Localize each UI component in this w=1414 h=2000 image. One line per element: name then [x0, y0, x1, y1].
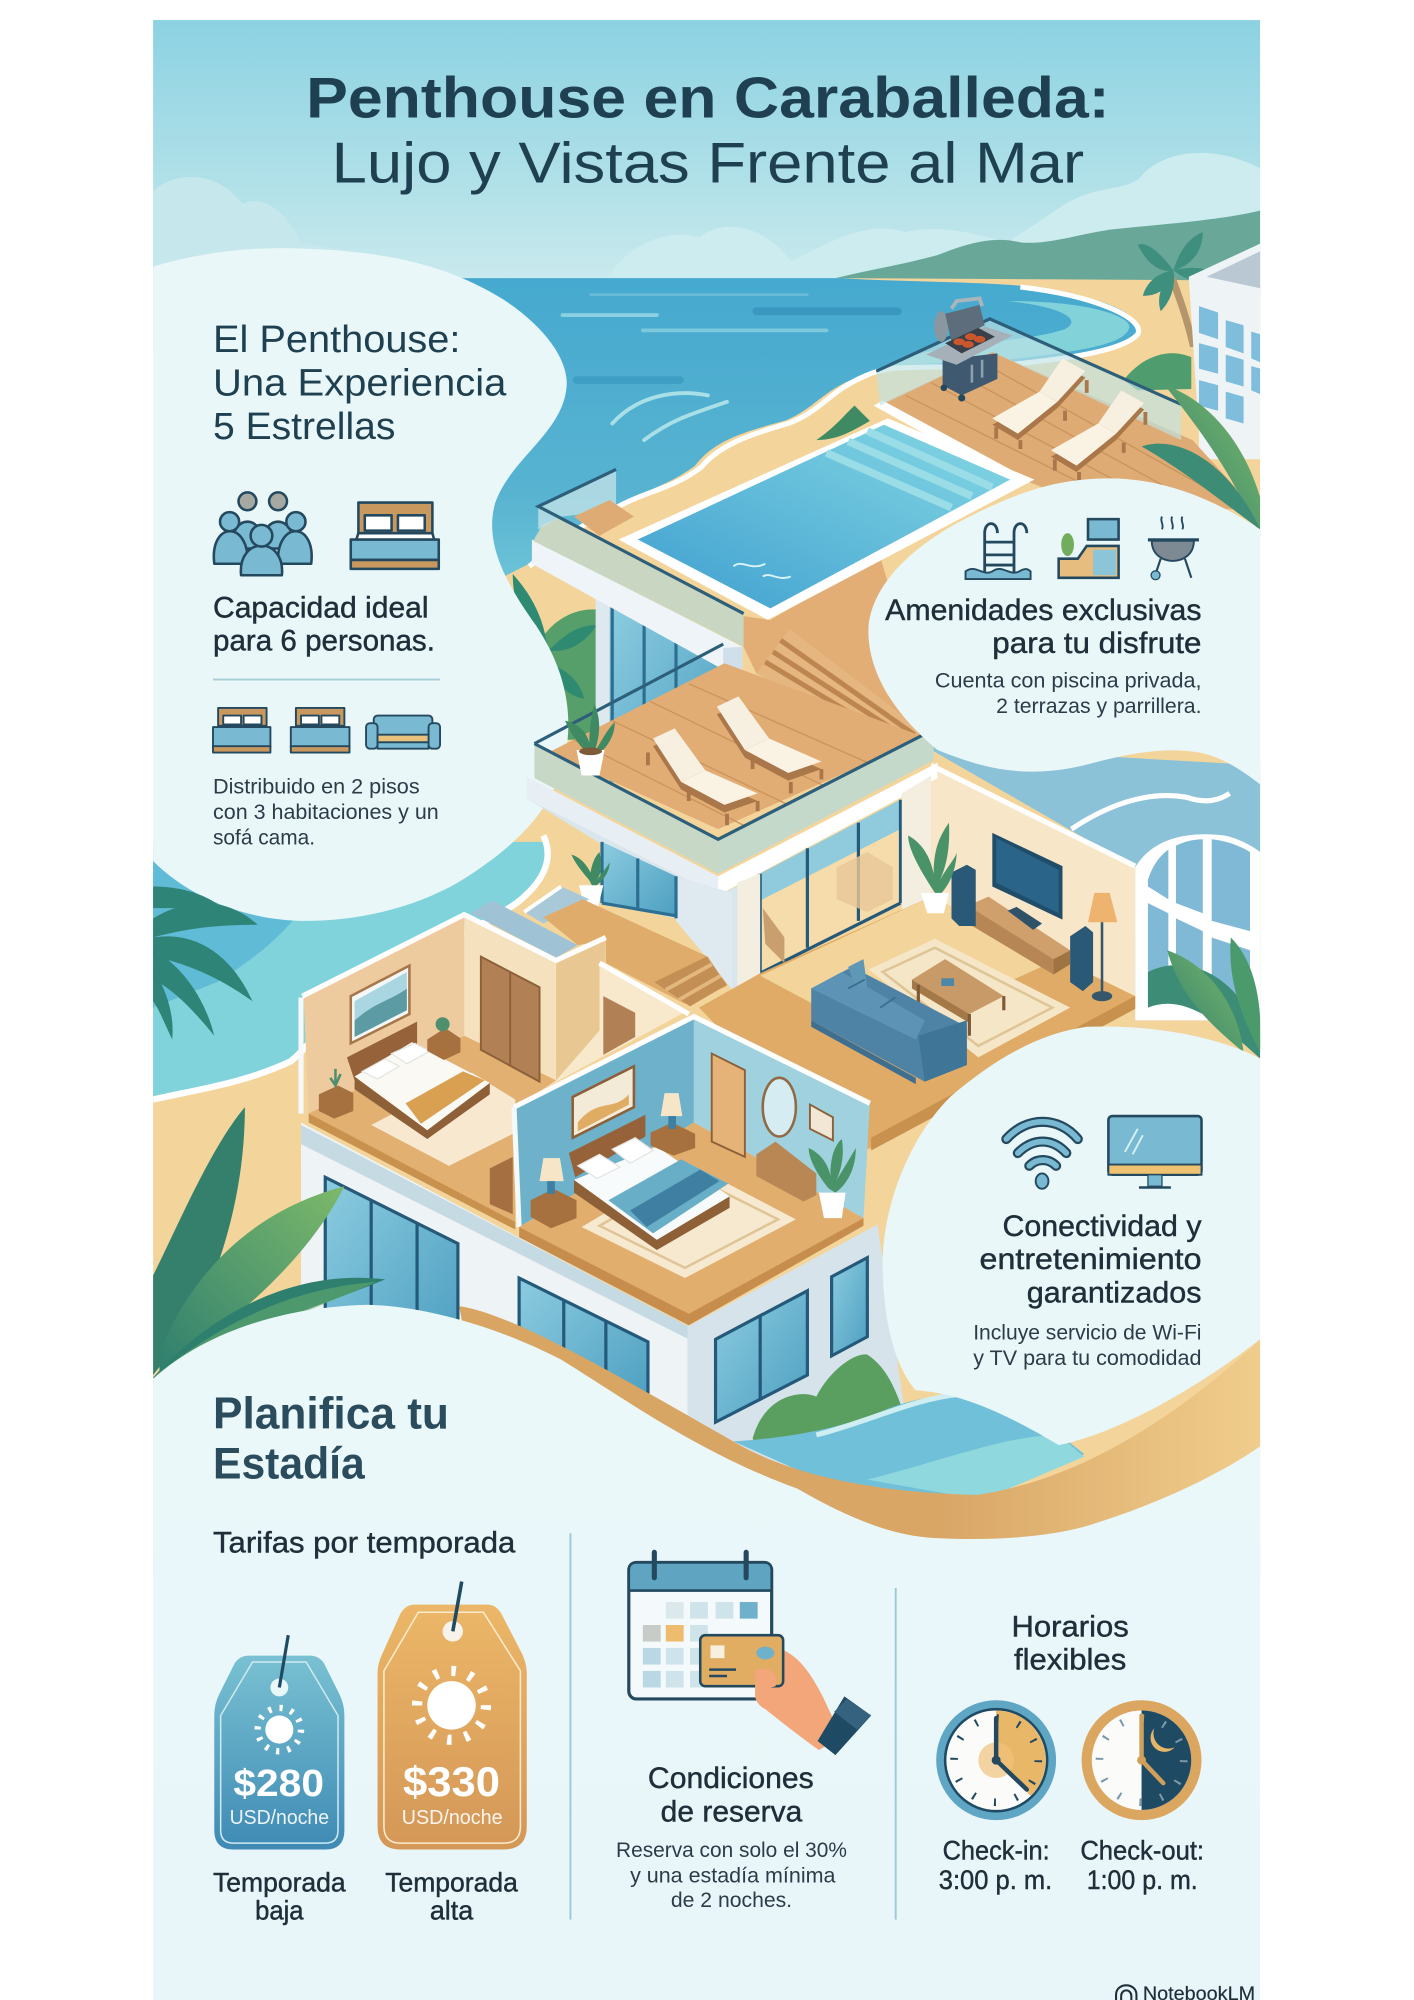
season labels: Temporada — [385, 1868, 518, 1898]
connectivity text — [973, 1210, 1202, 1370]
schedule heading — [1011, 1610, 1129, 1677]
window left — [325, 1177, 458, 1352]
beige bedroom — [301, 901, 689, 1230]
painting blue room — [573, 1066, 634, 1138]
closet door — [481, 957, 540, 1082]
sky background — [153, 20, 1260, 278]
amenities text — [885, 594, 1202, 718]
amenities text: Amenidades exclusivas — [885, 594, 1202, 627]
heading: plan your stay — [213, 1390, 449, 1488]
distribution text — [213, 773, 439, 849]
icon: monitor — [1108, 1116, 1202, 1187]
booking conditions: y una estadía mínima — [630, 1863, 836, 1888]
mid palm bush — [508, 574, 599, 740]
lower left foam — [153, 835, 548, 1099]
connectivity text: Conectividad y — [1003, 1210, 1202, 1243]
panel: amenities — [868, 478, 1260, 784]
heading: penthouse: El Penthouse: — [213, 318, 460, 361]
panel: left blob — [153, 248, 568, 921]
heading: plan your stay: Planifica tu — [213, 1390, 449, 1439]
connectivity text: entretenimiento — [980, 1243, 1202, 1276]
landing floor — [524, 886, 727, 1004]
icon: calendar and card — [629, 1552, 871, 1755]
speakers — [952, 865, 1093, 991]
connectivity text: y TV para tu comodidad — [973, 1345, 1202, 1370]
icon: bed large — [351, 503, 439, 569]
sun — [258, 1708, 301, 1751]
title: Lujo y Vistas Frente al Mar — [332, 131, 1084, 195]
icon: people — [214, 492, 312, 575]
icon: bed small two — [291, 708, 349, 753]
floor lamp — [1088, 893, 1117, 1001]
booking conditions: Condiciones — [648, 1762, 814, 1795]
capacity text: Capacidad ideal — [213, 591, 429, 624]
panel: connectivity blob — [883, 1027, 1260, 1445]
amenities text: 2 terrazas y parrillera. — [996, 693, 1202, 718]
bottom water — [733, 1395, 1084, 1500]
arched windows — [1135, 834, 1260, 1020]
icon: pool ladder — [966, 524, 1031, 579]
rug bedroom 2 — [582, 1163, 796, 1278]
tag: high season: USD/noche — [402, 1807, 503, 1829]
season labels: baja — [255, 1896, 304, 1926]
capacity text — [213, 591, 435, 658]
leaves lower left — [153, 1107, 385, 1384]
top deck — [874, 319, 1256, 510]
icon: grill — [1148, 517, 1199, 580]
small door — [603, 996, 635, 1055]
icon: barbecue — [926, 298, 1013, 402]
icon: sofa bed — [366, 716, 440, 749]
small frame — [810, 1105, 833, 1140]
sand band — [459, 1306, 1260, 1582]
building — [301, 298, 1256, 1531]
distribution text: Distribuido en 2 pisos — [213, 773, 420, 798]
deeper water left — [153, 855, 292, 1008]
season labels: alta — [430, 1896, 473, 1926]
heading: penthouse: Una Experiencia — [213, 361, 507, 404]
shore foam — [529, 287, 1139, 566]
sea — [462, 278, 1136, 576]
pool — [619, 418, 1034, 620]
sofa — [811, 959, 967, 1084]
tag: low season: $280 — [233, 1762, 324, 1805]
plant blue room — [809, 1139, 856, 1218]
heading: penthouse — [213, 318, 507, 448]
icon: terrace — [1059, 519, 1119, 578]
plant living room — [908, 823, 957, 913]
season labels: Temporada — [213, 1868, 346, 1898]
small plant by pool — [816, 406, 870, 440]
living floor — [699, 897, 1135, 1154]
check in and out times: 1:00 p. m. — [1087, 1865, 1198, 1895]
bed blue room — [569, 1115, 730, 1250]
palm lower left — [153, 886, 258, 1040]
stairs to living room — [654, 957, 727, 1006]
schedule heading: Horarios — [1011, 1610, 1129, 1643]
wood block — [490, 1157, 513, 1214]
right wave background — [925, 746, 1260, 1020]
hills — [835, 210, 1260, 300]
upper wood platform — [744, 560, 920, 735]
dresser — [756, 1142, 816, 1202]
booking conditions: Reserva con solo el 30% — [616, 1837, 847, 1862]
rug bedroom 1 — [371, 1073, 515, 1166]
deck glass rail — [876, 319, 1181, 440]
icon: wifi — [1006, 1122, 1078, 1189]
leaves top right — [1142, 385, 1260, 536]
clock: check-out — [1082, 1700, 1202, 1820]
nightstands blue room — [531, 1122, 695, 1228]
distribution text: sofá cama. — [213, 824, 315, 849]
tv console — [968, 897, 1070, 974]
check in and out times — [939, 1836, 1204, 1895]
title: Penthouse en Caraballeda: — [306, 66, 1110, 130]
loungers terrace — [648, 696, 821, 825]
amenities text: Cuenta con piscina privada, — [935, 668, 1202, 693]
window far right — [832, 1258, 867, 1356]
icon: bed small — [213, 708, 270, 753]
check in and out times: Check-in: — [943, 1836, 1050, 1866]
beige room floor — [309, 1036, 556, 1222]
middle floor exterior — [527, 776, 931, 1005]
coffee table — [912, 959, 1004, 1036]
nightstands — [319, 1017, 460, 1119]
stairs — [756, 630, 918, 734]
sun — [417, 1671, 486, 1740]
sand — [153, 278, 1260, 1575]
tv — [992, 833, 1062, 920]
plant terrace — [565, 704, 615, 776]
schedule heading: flexibles — [1014, 1644, 1126, 1677]
shrub — [753, 1354, 912, 1454]
door blue room — [712, 1054, 745, 1157]
infographic panel — [153, 20, 1261, 2000]
tag: high season: $330 — [403, 1758, 500, 1805]
tag: low season — [214, 1635, 344, 1849]
section: connectivity — [973, 1116, 1202, 1370]
wave streaks — [562, 295, 898, 440]
upper glass rail and slab — [532, 469, 744, 784]
leaves right — [1148, 938, 1261, 1059]
palm tree top right — [1125, 232, 1205, 390]
capacity text: para 6 personas. — [213, 625, 435, 658]
booking conditions: de 2 noches. — [671, 1887, 792, 1912]
title — [306, 66, 1110, 195]
booking conditions: de reserva — [661, 1795, 803, 1828]
rates heading: Tarifas por temporada — [213, 1526, 516, 1559]
season labels — [213, 1868, 518, 1926]
connectivity text: Incluye servicio de Wi-Fi — [973, 1319, 1202, 1344]
blue bedroom — [490, 1017, 870, 1325]
lower terrace — [527, 644, 937, 895]
panel: plan your stay — [153, 1305, 1260, 2000]
mirror — [763, 1078, 796, 1136]
amenities text: para tu disfrute — [992, 627, 1202, 660]
ground floor walls — [301, 1122, 918, 1531]
plant small left — [571, 852, 610, 907]
tag: low season: USD/noche — [230, 1807, 329, 1829]
window right — [716, 1291, 807, 1422]
distribution text: con 3 habitaciones y un — [213, 799, 439, 824]
check in and out times: Check-out: — [1080, 1836, 1204, 1866]
section: penthouse details — [213, 318, 507, 849]
credit card — [700, 1635, 783, 1686]
lamps — [540, 1158, 564, 1194]
bed room 1 — [347, 1022, 490, 1139]
heading: plan your stay: Estadía — [213, 1439, 366, 1488]
tag: high season — [378, 1582, 527, 1849]
window middle — [519, 1278, 648, 1403]
lower terrace wall — [931, 765, 1135, 996]
loungers top deck — [992, 358, 1145, 481]
clouds — [153, 152, 1260, 266]
connectivity text: garantizados — [1027, 1276, 1202, 1309]
heading: penthouse: 5 Estrellas — [213, 405, 395, 448]
distant building — [1189, 244, 1260, 459]
lower left sea — [153, 842, 548, 1099]
rug — [869, 939, 1070, 1057]
cuff — [818, 1696, 871, 1755]
lagoon shallows — [892, 301, 1130, 366]
clock: check-in — [936, 1700, 1056, 1820]
painting — [351, 966, 409, 1043]
booking conditions — [616, 1762, 847, 1912]
hand — [755, 1645, 842, 1750]
check in and out times: 3:00 p. m. — [939, 1865, 1052, 1895]
section: amenities — [885, 517, 1202, 718]
